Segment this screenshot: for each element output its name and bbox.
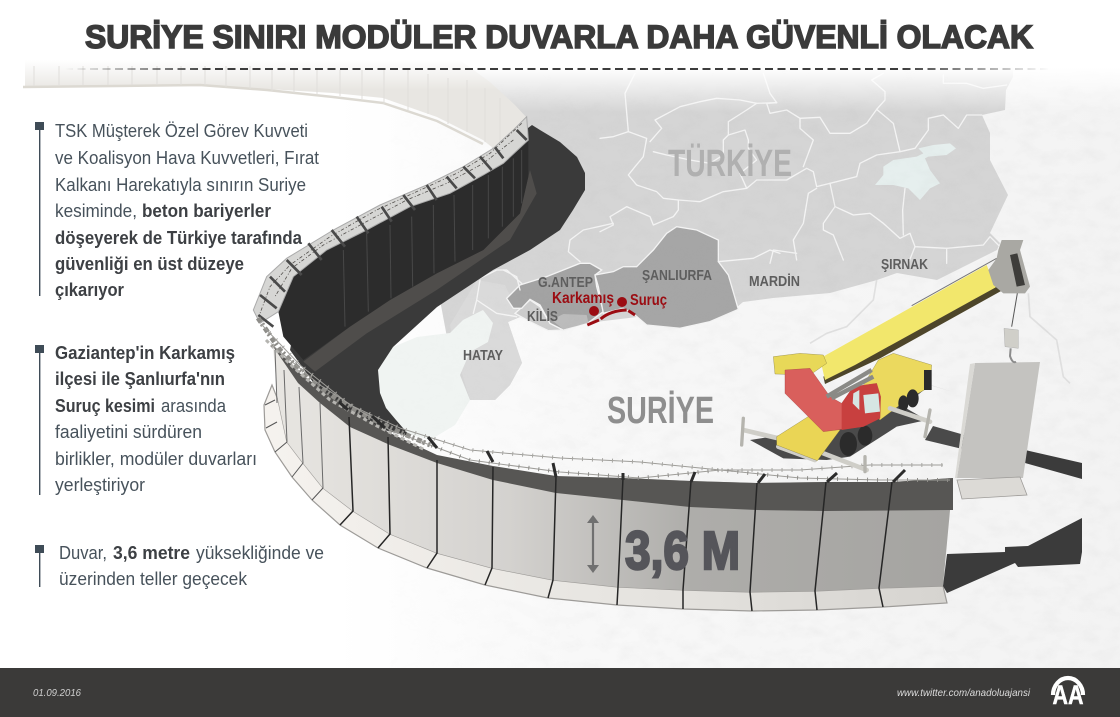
front barbed wire bbox=[258, 318, 950, 483]
block shadow strip bbox=[925, 426, 975, 452]
bullet 1 bbox=[35, 122, 44, 296]
label: Kilis: KİLİS bbox=[527, 308, 558, 325]
block left edge bbox=[955, 363, 975, 478]
Lake Van bbox=[875, 143, 956, 200]
bullet 3 bbox=[35, 545, 44, 587]
Gaziantep southern shade bbox=[552, 314, 588, 329]
province: Sanliurfa bbox=[595, 227, 738, 328]
label: Gaziantep: G.ANTEP bbox=[538, 274, 593, 291]
paragraph 1 lines: döşeyerek de Türkiye tarafında bbox=[55, 228, 303, 248]
Mediterranean pale sea bbox=[378, 310, 493, 440]
paragraph 1 lines: güvenliği en üst düzeye bbox=[55, 254, 244, 274]
cast shadows at right bbox=[943, 450, 1082, 593]
block foot bbox=[957, 477, 1027, 499]
rear yellow carrier bbox=[857, 353, 932, 420]
Turkey land mass bbox=[440, 60, 1013, 400]
front wall foot slabs bbox=[264, 385, 947, 611]
dashed rule under title bbox=[65, 68, 1050, 70]
back arc panel joints bbox=[34, 66, 500, 150]
paragraph 3 lines: yüksekliğinde ve bbox=[196, 543, 324, 563]
red cab bbox=[842, 383, 881, 430]
red crane body bbox=[785, 368, 881, 432]
paragraph 2 lines: faaliyetini sürdüren bbox=[55, 422, 202, 442]
back arc wall foot bbox=[23, 85, 483, 144]
wheels bbox=[840, 370, 932, 456]
label: Suruc: Suruç bbox=[630, 292, 667, 309]
Suruc marker bbox=[617, 297, 627, 307]
label: Mardin: MARDİN bbox=[749, 273, 800, 290]
paragraph 3 lines bbox=[59, 543, 324, 589]
date: 01.09.2016 bbox=[33, 687, 81, 699]
label: Sirnak: ŞIRNAK bbox=[881, 256, 928, 273]
label: Hatay: HATAY bbox=[463, 347, 503, 364]
dark shaded band on front wall bbox=[270, 342, 953, 511]
footer background bbox=[0, 668, 1120, 717]
paragraph 1 lines: beton bariyerler bbox=[142, 201, 271, 221]
paragraph 1 lines: Kalkanı Harekatıyla sınırın Suriye bbox=[55, 175, 306, 195]
paragraph 2 lines bbox=[55, 343, 257, 495]
paragraph 3 lines: üzerinden teller geçecek bbox=[59, 569, 248, 589]
province: Kilis bbox=[515, 300, 563, 331]
text block 2 bbox=[35, 343, 257, 495]
crane ground shadow bbox=[750, 377, 952, 460]
paragraph 2 lines: yerleştiriyor bbox=[55, 475, 145, 495]
map of Turkey border provinces bbox=[378, 60, 1013, 440]
paragraph 2 lines: Suruç kesimi bbox=[55, 396, 155, 416]
paragraph 1 lines: TSK Müşterek Özel Görev Kuvveti bbox=[55, 121, 308, 141]
hook cable bbox=[1012, 293, 1017, 327]
hydraulic cylinders bbox=[827, 370, 873, 398]
label: Türkiye: TÜRKİYE bbox=[668, 142, 792, 185]
hook bbox=[1010, 348, 1016, 362]
icon: Anadolu Agency logo: AA bbox=[1052, 680, 1084, 710]
hanging wall block bbox=[925, 362, 1040, 499]
paragraph 3 lines: Duvar, bbox=[59, 543, 107, 563]
paragraph 1 lines: çıkarıyor bbox=[55, 280, 124, 300]
label: Karkamis: Karkamış bbox=[552, 290, 614, 307]
footer bar bbox=[0, 668, 1120, 717]
paragraph 2 lines: ilçesi ile Şanlıurfa'nın bbox=[55, 369, 225, 389]
region names bbox=[463, 142, 928, 432]
outrigger arms bbox=[742, 408, 930, 472]
paragraph 1 lines: ve Koalisyon Hava Kuvvetleri, Fırat bbox=[55, 148, 319, 168]
paragraph 3 lines: 3,6 metre bbox=[113, 543, 190, 563]
label: Suriye: SURİYE bbox=[607, 390, 714, 432]
twitter url: www.twitter.com/anadoluajansi bbox=[897, 687, 1031, 699]
province borders bbox=[600, 73, 1007, 263]
red border route bbox=[587, 310, 635, 325]
front wall face bbox=[273, 347, 953, 592]
front yellow chassis bbox=[777, 413, 840, 461]
modular concrete wall bbox=[23, 60, 953, 611]
back arc wall face bbox=[25, 60, 527, 148]
Hatay lighter area bbox=[450, 280, 522, 400]
height arrow bbox=[587, 515, 599, 573]
wire support posts bbox=[258, 130, 527, 327]
inner face joints bbox=[343, 150, 522, 327]
province: Gaziantep bbox=[507, 263, 603, 330]
wire coils bbox=[260, 123, 522, 313]
paragraph 2 lines: Gaziantep'in Karkamış bbox=[55, 343, 235, 363]
text block 3 bbox=[35, 543, 324, 589]
Karkamis marker bbox=[589, 306, 599, 316]
paragraph 1 lines: kesiminde, bbox=[55, 201, 137, 221]
mottled terrain texture bbox=[380, 70, 1120, 668]
boom head bbox=[988, 240, 1030, 293]
counterweight bbox=[773, 353, 827, 375]
hoist cable line bbox=[912, 258, 997, 306]
S curve wall segment bbox=[253, 117, 537, 372]
cab windows bbox=[853, 390, 880, 413]
bullet 2 bbox=[35, 345, 44, 495]
title: SURİYE SINIRI MODÜLER DUVARLA DAHA GÜVENLİ OLACAK bbox=[85, 19, 1033, 55]
Syria rivers bbox=[810, 280, 1070, 383]
top white fade bbox=[0, 0, 1120, 112]
paragraph 2 lines: arasında bbox=[161, 396, 227, 416]
paragraph 2 lines: birlikler, modüler duvarları bbox=[55, 449, 257, 469]
top of wall with barbed wire bbox=[253, 117, 528, 323]
block face bbox=[957, 362, 1040, 478]
route and place labels bbox=[463, 142, 928, 432]
height label: 3,6 M bbox=[625, 521, 740, 581]
front wall joints bbox=[265, 350, 892, 611]
foot of dark face bbox=[303, 170, 537, 372]
text block 1 bbox=[35, 121, 319, 300]
boom underside bbox=[823, 287, 1004, 384]
paragraph 1 lines bbox=[55, 121, 319, 300]
hook block bbox=[1004, 328, 1018, 348]
boom bbox=[820, 265, 996, 380]
dark inner face bbox=[278, 140, 528, 360]
wall shadow on ground bbox=[290, 125, 585, 436]
label: Şanlıurfa: ŞANLIURFA bbox=[642, 267, 712, 284]
boom head slot bbox=[1010, 253, 1025, 287]
crane bbox=[742, 240, 1030, 472]
